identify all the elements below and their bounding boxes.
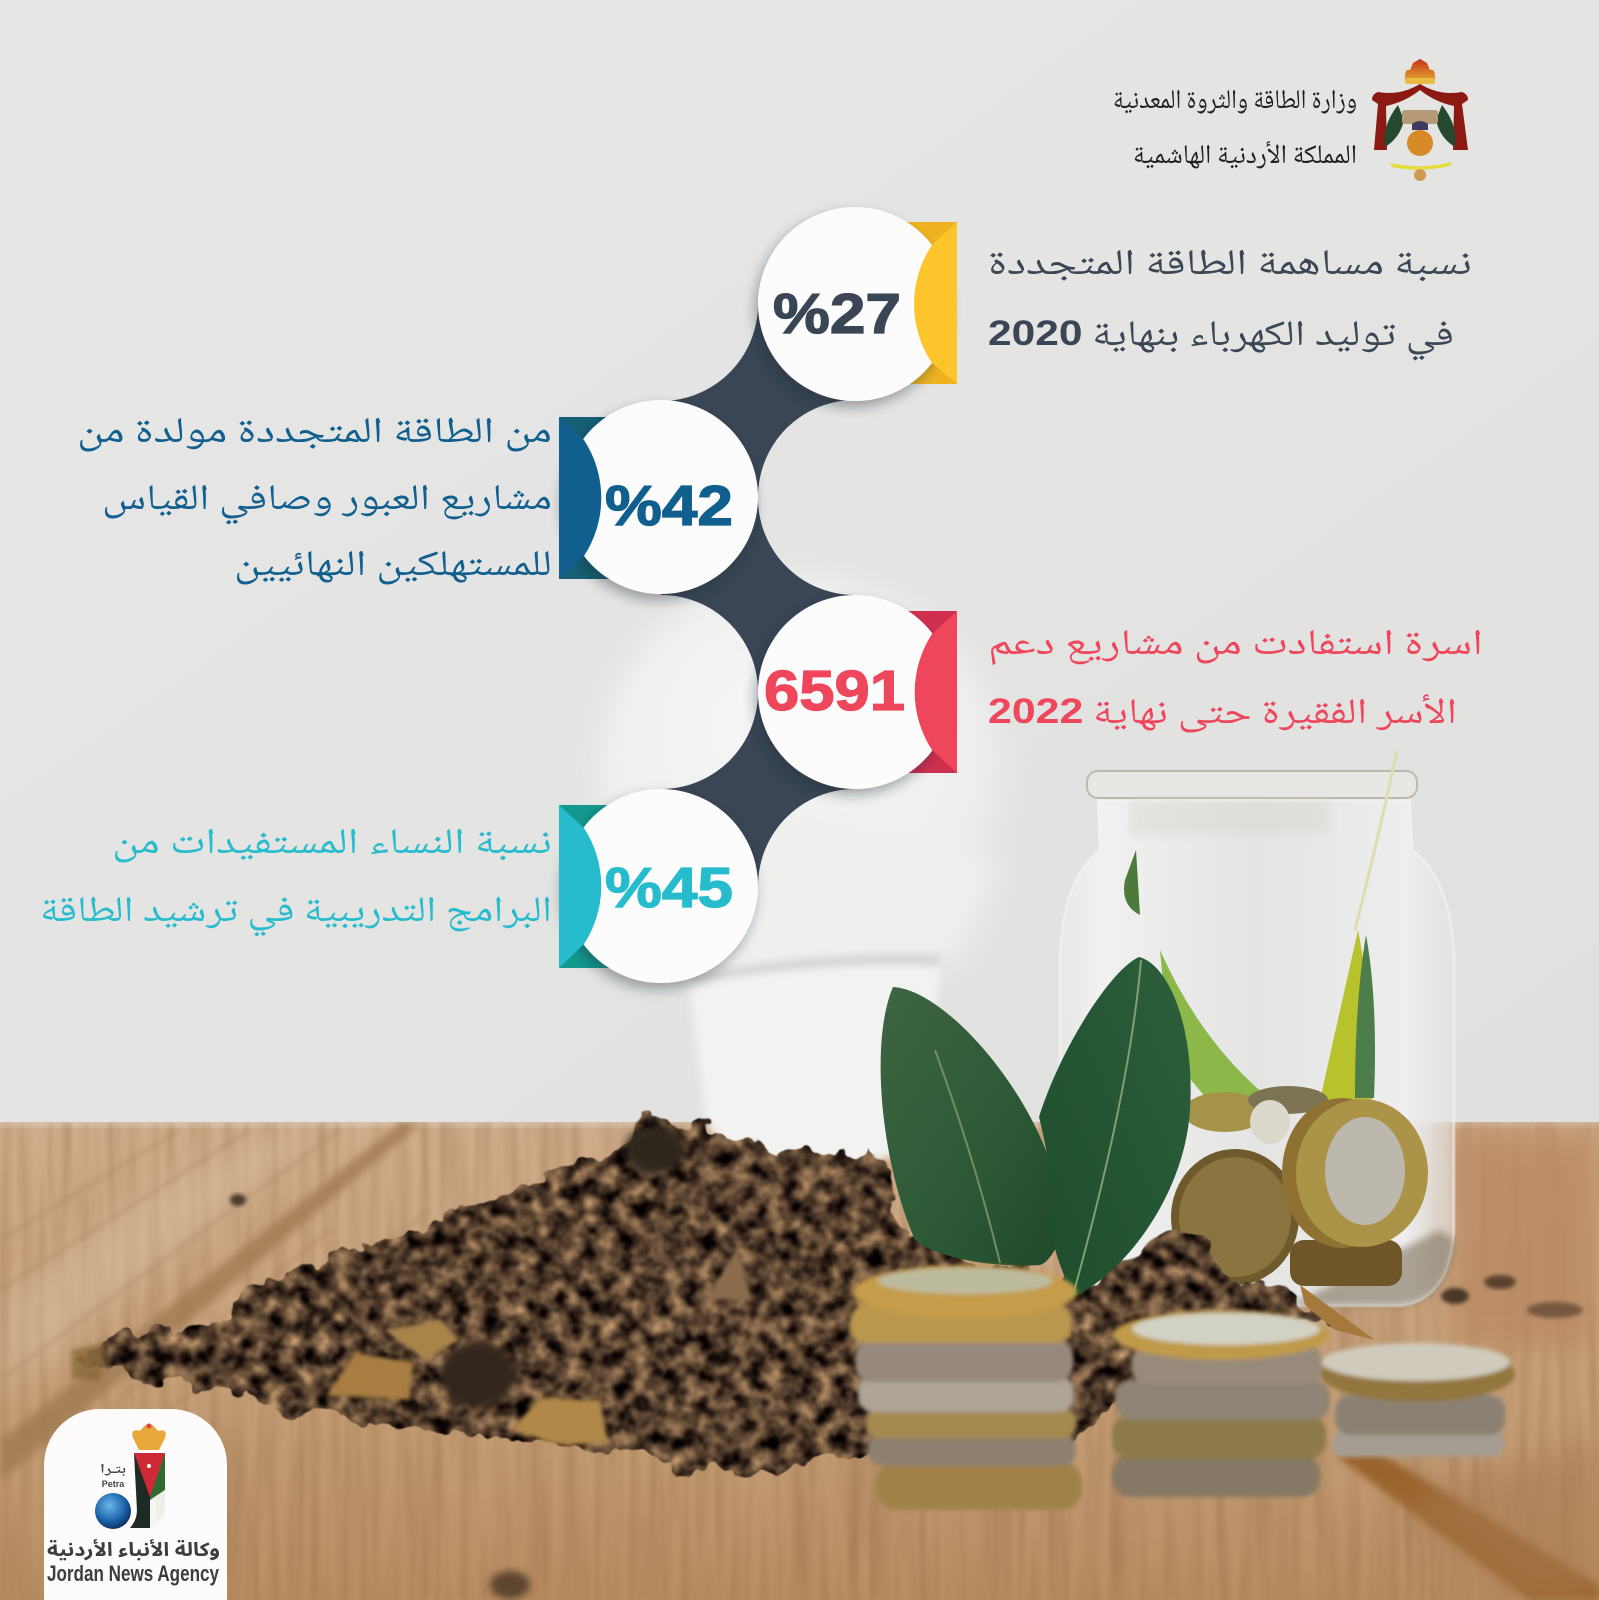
ribbon yellow bbox=[758, 207, 957, 401]
dark connector bbox=[661, 304, 855, 886]
soil pile bbox=[72, 1117, 1375, 1480]
description: البرامج التدريبية في ترشيد الطاقة bbox=[40, 883, 552, 944]
soil chunks bbox=[327, 1353, 413, 1400]
value: %42 bbox=[605, 474, 733, 538]
glass jar bbox=[1060, 750, 1454, 1306]
description: مشاريع العبور وصافي القياس bbox=[102, 471, 552, 532]
ministry name bbox=[1113, 80, 1357, 181]
photo background bbox=[0, 585, 1599, 1600]
value: %27 bbox=[773, 282, 901, 346]
left stack bbox=[850, 1265, 1082, 1510]
description: من الطاقة المتجددة مولدة من bbox=[77, 404, 552, 465]
green leaves bbox=[881, 957, 1191, 1298]
value: 6591 bbox=[764, 659, 905, 723]
value: %45 bbox=[605, 856, 733, 920]
description: في توليد الكهرباء بنهاية 2020 bbox=[988, 307, 1454, 368]
agency name bbox=[47, 1531, 220, 1586]
icon: crown bbox=[132, 1424, 166, 1450]
icon: globe bbox=[95, 1493, 131, 1529]
wooden floor bbox=[0, 1118, 1599, 1600]
jar plant bbox=[1124, 850, 1140, 915]
description bbox=[40, 815, 552, 944]
description: اسرة استفادت من مشاريع دعم bbox=[988, 616, 1483, 677]
Petra news agency logo bbox=[44, 1409, 227, 1600]
item 2: 42 percent bbox=[77, 400, 758, 598]
item 1: 27 percent bbox=[758, 207, 1472, 401]
petra label: بتـرا bbox=[100, 1460, 127, 1482]
light bulb bbox=[597, 575, 1003, 1168]
wall backdrop bbox=[0, 0, 1599, 1130]
petra label bbox=[100, 1460, 127, 1489]
ministry name: المملكة الأردنية الهاشمية bbox=[1133, 135, 1357, 181]
item 4: 45 percent bbox=[40, 789, 758, 983]
petra label: Petra bbox=[102, 1479, 125, 1489]
description bbox=[77, 404, 552, 598]
ministry name: وزارة الطاقة والثروة المعدنية bbox=[1113, 80, 1357, 126]
ribbon teal bbox=[559, 789, 758, 983]
description bbox=[988, 236, 1472, 368]
middle stack bbox=[1112, 1310, 1330, 1497]
icon: flag J bbox=[130, 1453, 165, 1528]
right stack bbox=[1321, 1343, 1515, 1457]
logo panel bbox=[44, 1409, 227, 1600]
jar coins bbox=[1183, 1092, 1267, 1132]
description: نسبة النساء المستفيدات من bbox=[112, 815, 552, 876]
item 3: 6591 households bbox=[758, 595, 1483, 789]
icon: royal crest bbox=[1372, 59, 1468, 181]
description bbox=[988, 616, 1483, 746]
description: الأسر الفقيرة حتى نهاية 2022 bbox=[988, 685, 1457, 746]
description: نسبة مساهمة الطاقة المتجددة bbox=[988, 236, 1472, 297]
coin stacks bbox=[850, 1265, 1515, 1510]
description: للمستهلكين النهائيين bbox=[234, 537, 552, 598]
agency name: وكالة الأنباء الأردنية bbox=[47, 1531, 220, 1571]
ribbon red bbox=[758, 595, 957, 789]
header: ministry logo bbox=[1113, 59, 1468, 181]
agency name: Jordan News Agency bbox=[47, 1561, 220, 1586]
ribbon blue bbox=[559, 400, 758, 594]
